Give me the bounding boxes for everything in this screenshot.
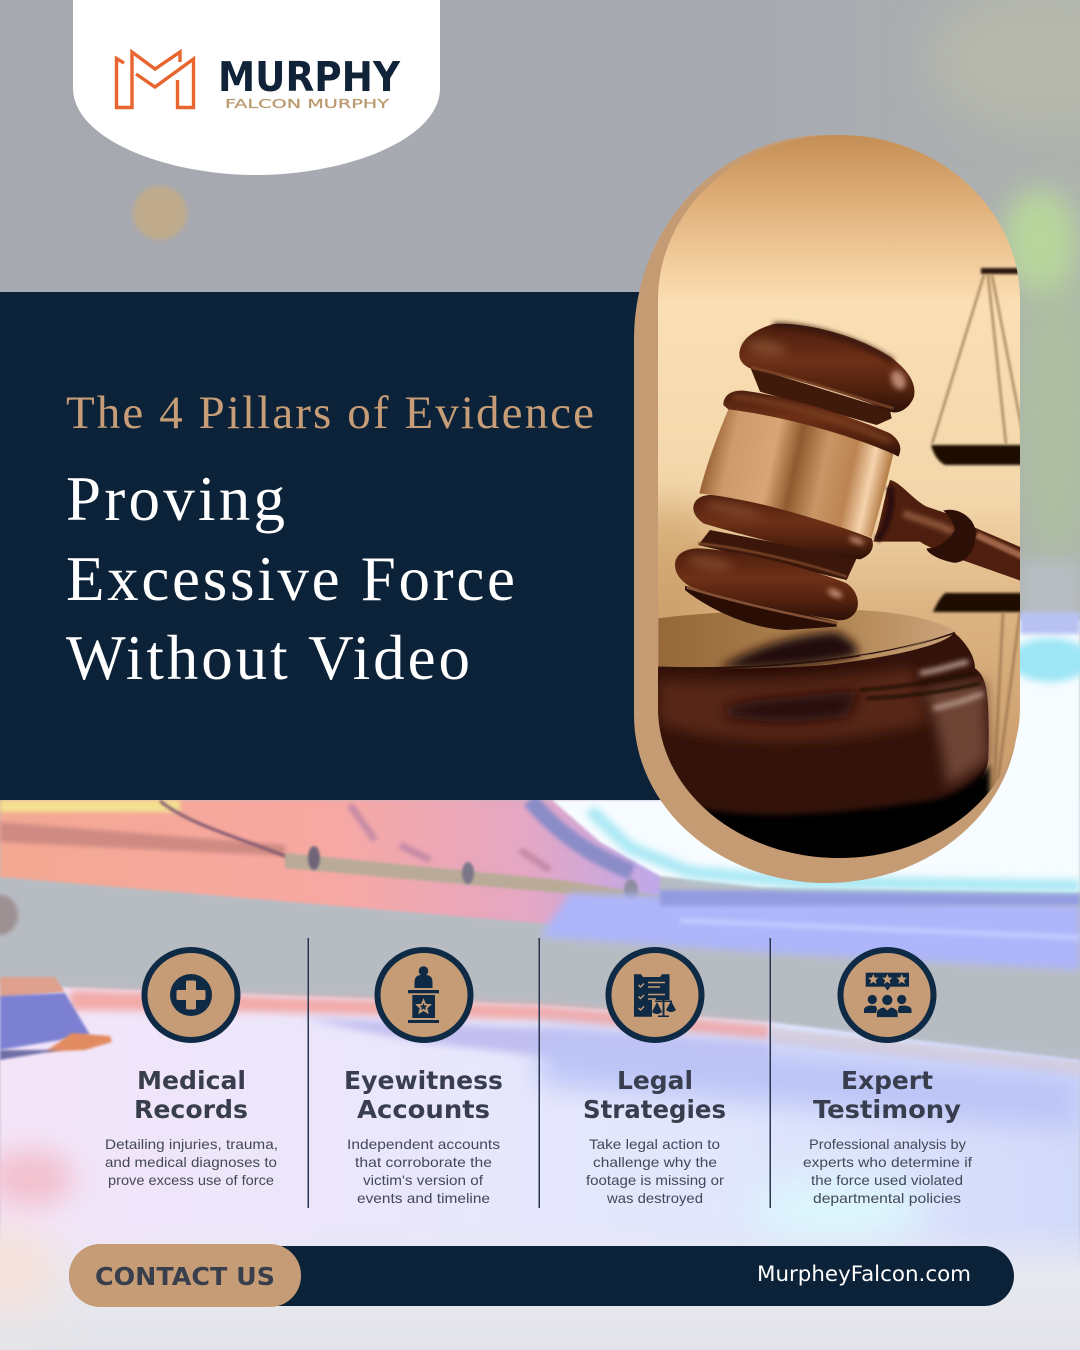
contact button [69,1244,301,1307]
heading: Expert [841,1066,933,1095]
heading: Testimony [813,1095,961,1124]
main title: Excessive Force [66,544,515,614]
description: footage is missing or [586,1172,724,1188]
heading: Records [134,1095,248,1124]
logo subtitle: FALCON MURPHY [225,97,390,111]
description [803,1136,972,1206]
heading: Eyewitness [344,1066,503,1095]
description: challenge why the [593,1154,717,1170]
bronze band [699,409,893,537]
description: victim's version of [363,1172,483,1188]
description: departmental policies [813,1190,961,1206]
description: was destroyed [606,1190,703,1206]
heading [813,1066,961,1124]
pillar: legal strategies [583,950,726,1206]
pillar dividers [308,938,771,1208]
description: Independent accounts [347,1136,500,1152]
photo: gavel and scales [658,135,1020,858]
heading [583,1066,726,1124]
icon: rated experts [840,950,934,1040]
description: Professional analysis by [809,1136,966,1152]
scales of justice, blurred [931,268,1024,790]
main title [66,464,515,693]
description: Take legal action to [589,1136,720,1152]
website: MurpheyFalcon.com [757,1262,971,1286]
heading: Strategies [583,1095,726,1124]
pillar: eyewitness accounts [344,950,503,1206]
heading [344,1066,503,1124]
logo mark: orange M [116,52,194,108]
contact label: CONTACT US [95,1262,275,1291]
description: the force used violated [811,1172,963,1188]
lower collar [693,495,873,559]
heading: Medical [137,1066,246,1095]
top knob [739,324,914,413]
logo card [73,0,440,175]
description: experts who determine if [803,1154,972,1170]
heading [134,1066,248,1124]
description: Detailing injuries, trauma, [105,1136,278,1152]
sound block [657,609,990,867]
upper collar [723,391,900,457]
upper neck [750,367,892,425]
main title: Without Video [66,623,470,693]
description [105,1136,278,1188]
description: that corroborate the [355,1154,492,1170]
block top surface [658,609,955,668]
gavel (drawn in 3x coordinates) [675,324,1023,630]
icon: clipboard with scales [608,950,702,1040]
tan backing capsule [634,135,1018,883]
pillar: expert testimony [803,950,972,1206]
description [347,1136,500,1206]
icon: podium speaker [378,950,470,1040]
logo wordmark: MURPHY [218,53,401,101]
contact bar [69,1244,1014,1307]
heading: Accounts [357,1095,490,1124]
description: prove excess use of force [108,1172,274,1188]
navy title panel [0,292,664,800]
main title: Proving [66,464,285,534]
eyebrow heading: The 4 Pillars of Evidence [66,387,594,439]
heading: Legal [617,1066,693,1095]
handle [873,480,1023,582]
decorative bokeh orb [133,186,187,240]
description: events and timeline [357,1190,490,1206]
pillar: medical records [105,950,278,1188]
description [586,1136,724,1206]
description: and medical diagnoses to [105,1154,277,1170]
icon: medical cross [144,950,238,1040]
neck and lower knob [675,530,858,630]
